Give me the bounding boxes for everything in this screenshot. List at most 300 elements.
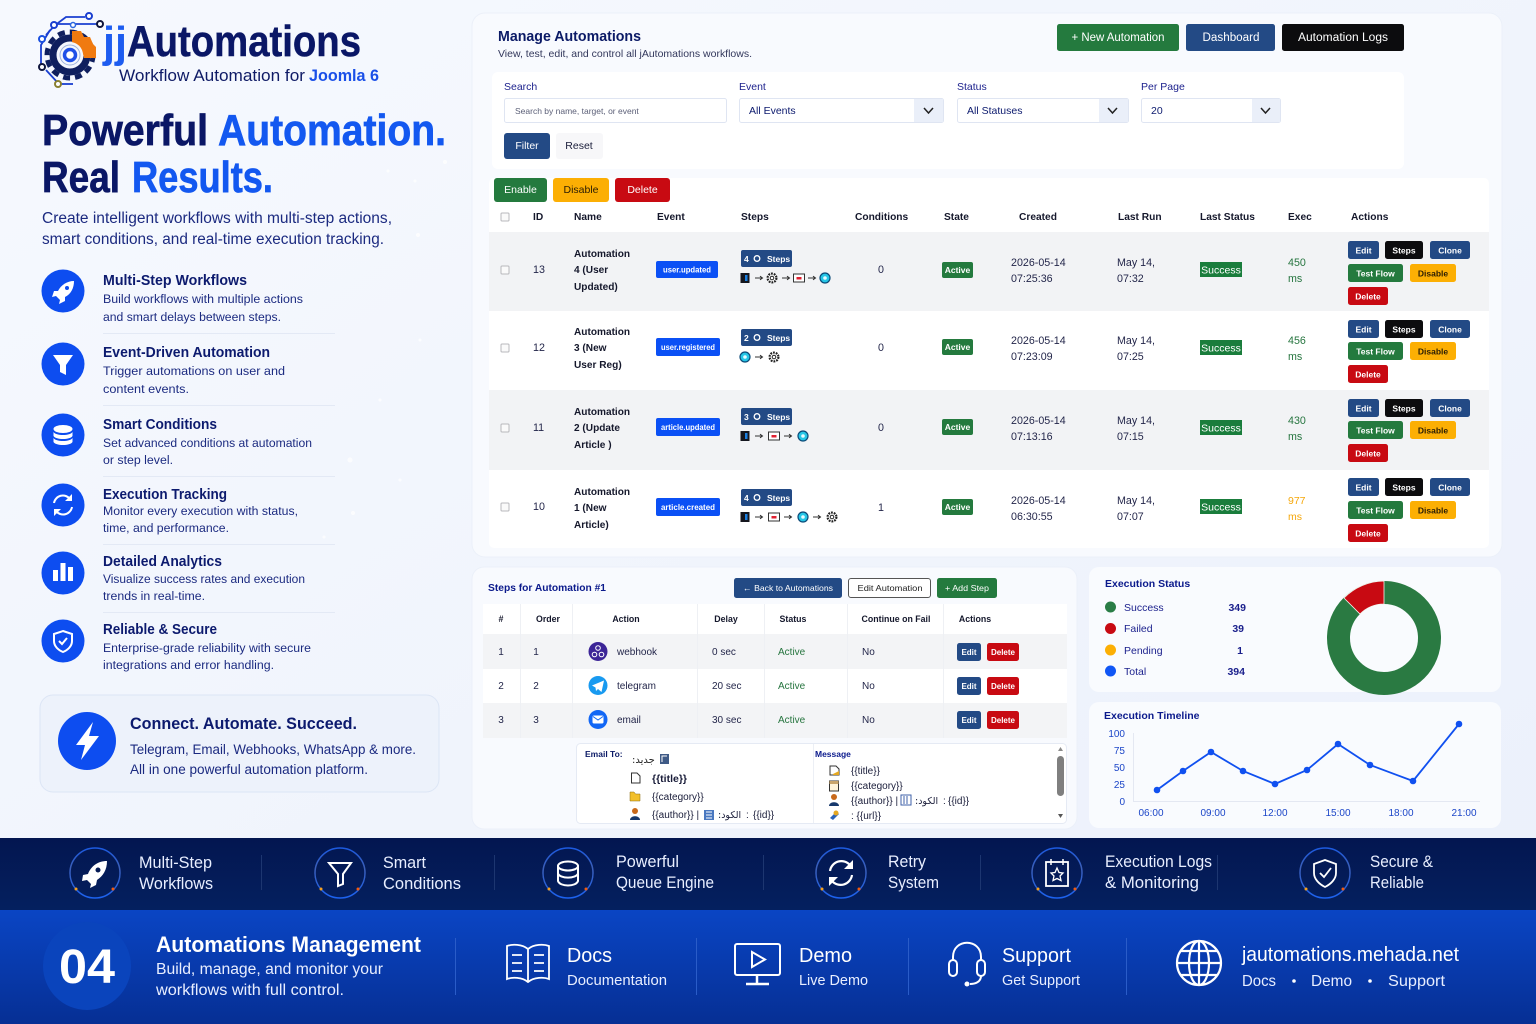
row: automation 11: Delete bbox=[1355, 448, 1381, 458]
headline bbox=[42, 106, 446, 202]
button: reset bbox=[556, 133, 603, 159]
event select bbox=[740, 98, 944, 122]
panel: execution status: Execution Status bbox=[1105, 578, 1190, 590]
row: automation 13: Steps bbox=[1392, 246, 1416, 256]
status select: All Statuses bbox=[967, 105, 1022, 117]
logo wordmark: jj bbox=[102, 18, 127, 67]
event select: All Events bbox=[749, 105, 796, 117]
row: automation 11: article.updated bbox=[661, 422, 715, 432]
legend: Success bbox=[1124, 602, 1164, 614]
message column: {{category}} bbox=[851, 781, 903, 792]
row: automation 11 bbox=[501, 399, 1470, 462]
legend: Pending bbox=[1124, 645, 1163, 657]
step row: email: Edit bbox=[961, 716, 977, 725]
section number bbox=[43, 922, 131, 1010]
message column: {{title}} bbox=[851, 766, 881, 777]
row: automation 12: Clone bbox=[1438, 324, 1462, 334]
row: automation 12: 07:23:09 bbox=[1011, 351, 1053, 363]
link: docs: Documentation bbox=[567, 973, 667, 989]
row: automation 10: ms bbox=[1288, 511, 1302, 523]
strip item: smart conditions: Smart bbox=[383, 854, 426, 872]
line chart bbox=[1108, 721, 1480, 819]
feature: reliable and secure: Reliable & Secure bbox=[103, 622, 217, 638]
strip item: smart conditions bbox=[315, 848, 461, 898]
strip item: retry system: Retry bbox=[888, 853, 927, 871]
feature list bbox=[42, 270, 335, 672]
step row: email: 3 bbox=[498, 715, 504, 726]
table header: Conditions bbox=[855, 212, 909, 223]
bulk buttons: Delete bbox=[627, 184, 658, 196]
step row: webhook bbox=[498, 642, 1019, 661]
row: automation 10: 10 bbox=[533, 501, 545, 513]
strip item: execution logs: Execution Logs bbox=[1105, 853, 1212, 871]
line chart: 06:00 bbox=[1138, 808, 1164, 819]
row: automation 13: ms bbox=[1288, 273, 1302, 285]
legend: Failed bbox=[1124, 623, 1153, 635]
row: automation 12: 2026-05-14 bbox=[1011, 335, 1066, 347]
feature: event-driven automation: Event-Driven Automation bbox=[103, 345, 270, 361]
row: automation 10: article.created bbox=[661, 502, 715, 512]
row: automation 13: Automation bbox=[574, 249, 630, 260]
row: automation 13: Disable bbox=[1418, 268, 1448, 278]
panel: execution timeline: Execution Timeline bbox=[1104, 710, 1200, 722]
panel: manage automations bbox=[472, 13, 1502, 557]
link: website: Docs bbox=[1242, 973, 1276, 990]
bulk buttons: Disable bbox=[563, 184, 599, 196]
row: automation 13: 450 bbox=[1288, 257, 1306, 269]
row: automation 11: 07:13:16 bbox=[1011, 431, 1053, 443]
row: automation 11: Disable bbox=[1418, 426, 1448, 436]
strip item: multi-step workflows: Multi-Step bbox=[139, 854, 212, 872]
row: automation 10: Active bbox=[945, 502, 971, 512]
email column: :جديد bbox=[632, 755, 655, 766]
row: automation 10: 4 bbox=[744, 493, 749, 503]
feature: smart conditions: or step level. bbox=[103, 453, 173, 467]
step row: telegram: 20 sec bbox=[712, 681, 741, 692]
intro text: smart conditions, and real-time execution tracking. bbox=[42, 231, 384, 248]
link: demo bbox=[735, 944, 868, 989]
feature: detailed analytics: Visualize success rates and execution bbox=[103, 572, 305, 586]
strip item: secure and reliable: Secure & bbox=[1370, 853, 1433, 871]
status select bbox=[958, 98, 1128, 122]
row: automation 11: Article ) bbox=[574, 440, 612, 451]
table header: Event bbox=[657, 212, 685, 223]
row: automation 11: ms bbox=[1288, 431, 1302, 443]
band: feature strip bbox=[0, 838, 1536, 910]
logo: Automations bbox=[127, 17, 361, 66]
email column: : bbox=[746, 810, 749, 821]
legend: 394 bbox=[1227, 666, 1245, 678]
row: automation 10 bbox=[501, 478, 1470, 542]
row: automation 12: Disable bbox=[1418, 346, 1448, 356]
panel heading: Manage Automations bbox=[498, 29, 641, 45]
headline: Real bbox=[42, 153, 120, 202]
filter card: Event bbox=[739, 81, 766, 93]
row: automation 13: 07:32 bbox=[1117, 273, 1144, 285]
legend bbox=[1105, 602, 1246, 678]
row: automation 10: Steps bbox=[1392, 482, 1416, 492]
row: automation 12: Steps bbox=[767, 333, 790, 343]
row: automation 11: Active bbox=[945, 422, 971, 432]
feature: reliable and secure bbox=[42, 620, 311, 672]
feature: smart conditions: Set advanced conditions at automation bbox=[103, 436, 312, 450]
steps table header bbox=[499, 614, 991, 624]
email column: :الكود bbox=[718, 810, 741, 821]
feature: execution tracking: Monitor every execution with status, bbox=[103, 504, 298, 518]
row: automation 13: 2026-05-14 bbox=[1011, 257, 1066, 269]
row: automation 10: Delete bbox=[1355, 528, 1381, 538]
headline: Powerful bbox=[42, 106, 208, 155]
automations table bbox=[489, 178, 1489, 548]
row: automation 12: May 14, bbox=[1117, 335, 1155, 347]
button: back to automations bbox=[734, 578, 842, 598]
panel: execution status bbox=[1089, 567, 1501, 692]
button: add step bbox=[937, 578, 997, 598]
row: automation 13: Clone bbox=[1438, 246, 1462, 256]
button: automation logs bbox=[1282, 24, 1404, 51]
step row: telegram: 2 bbox=[533, 681, 539, 692]
button: new automation bbox=[1057, 24, 1179, 51]
table header: Exec bbox=[1288, 212, 1312, 223]
link: website: jautomations.mehada.net bbox=[1241, 944, 1459, 966]
icon: gear logo with circuit lines bbox=[39, 13, 103, 87]
link: demo: Demo bbox=[799, 945, 852, 967]
row: automation 11: Success bbox=[1201, 422, 1241, 434]
row: automation 11: Automation bbox=[574, 407, 630, 418]
per page select: 20 bbox=[1151, 105, 1163, 117]
steps table header: Actions bbox=[959, 614, 991, 624]
steps table header: Status bbox=[780, 614, 807, 624]
logo tagline: Workflow Automation for bbox=[119, 66, 305, 85]
strip item: smart conditions: Conditions bbox=[383, 875, 461, 893]
callout: connect automate succeed bbox=[40, 695, 439, 792]
band: footer bbox=[0, 910, 1536, 1024]
row: automation 11: Steps bbox=[767, 412, 790, 422]
legend: 349 bbox=[1228, 602, 1246, 614]
strip item: secure and reliable: Reliable bbox=[1370, 874, 1424, 892]
link: support: Support bbox=[1002, 945, 1071, 967]
row: automation 13: May 14, bbox=[1117, 257, 1155, 269]
step row: webhook: Edit bbox=[961, 648, 977, 657]
strip item: powerful queue engine: Queue Engine bbox=[616, 874, 714, 892]
row: automation 13: 07:25:36 bbox=[1011, 273, 1053, 285]
message column: : bbox=[943, 796, 946, 807]
button: automation logs: Automation Logs bbox=[1298, 32, 1388, 44]
row: automation 13: Active bbox=[945, 265, 971, 275]
link: docs bbox=[507, 945, 667, 989]
row: automation 10: Edit bbox=[1355, 482, 1372, 492]
per page select bbox=[1142, 98, 1280, 122]
table header: ID bbox=[533, 212, 543, 223]
feature: execution tracking: Execution Tracking bbox=[103, 487, 227, 503]
section title: workflows with full control. bbox=[155, 982, 344, 999]
strip item: multi-step workflows: Workflows bbox=[139, 875, 213, 893]
button: filter bbox=[504, 133, 550, 159]
strip item: retry system: System bbox=[888, 874, 939, 892]
row: automation 10: 2026-05-14 bbox=[1011, 495, 1066, 507]
row: automation 10: Test Flow bbox=[1356, 506, 1395, 516]
headline: Results. bbox=[132, 153, 273, 202]
steps table header: Order bbox=[536, 614, 561, 624]
legend: 1 bbox=[1237, 645, 1243, 657]
strip item: powerful queue engine bbox=[543, 848, 714, 898]
message column: {{author}} | bbox=[851, 796, 898, 807]
row: automation 12: ms bbox=[1288, 351, 1302, 363]
button: filter: Filter bbox=[515, 140, 539, 152]
row: automation 10: Article) bbox=[574, 520, 609, 531]
row: automation 10: May 14, bbox=[1117, 495, 1155, 507]
intro text: Create intelligent workflows with multi-step actions, bbox=[42, 210, 392, 227]
feature: multi-step workflows: Build workflows with multiple actions bbox=[103, 292, 303, 306]
row: automation 12: 12 bbox=[533, 342, 545, 354]
step row: telegram bbox=[498, 676, 1019, 695]
feature: smart conditions: Smart Conditions bbox=[103, 417, 217, 433]
logo: Joomla 6 bbox=[309, 66, 379, 85]
row: automation 13: Updated) bbox=[574, 282, 618, 293]
row: automation 12: 3 (New bbox=[574, 343, 607, 354]
row: automation 11: 0 bbox=[878, 422, 884, 434]
line chart: 15:00 bbox=[1325, 808, 1351, 819]
search input: Search by name, target, or event bbox=[515, 106, 639, 116]
feature: detailed analytics: trends in real-time. bbox=[103, 589, 205, 603]
button: reset: Reset bbox=[565, 140, 593, 152]
step row: telegram: Delete bbox=[991, 682, 1016, 691]
row: automation 13: Test Flow bbox=[1356, 268, 1395, 278]
row: automation 13 bbox=[501, 241, 1470, 305]
steps table bbox=[483, 604, 1067, 738]
row: automation 11: Test Flow bbox=[1356, 426, 1395, 436]
email column: Email To: bbox=[585, 749, 623, 759]
step row: webhook: 1 bbox=[498, 647, 504, 658]
button: back to automations: ← Back to Automations bbox=[743, 583, 833, 593]
section number: 04 bbox=[59, 941, 115, 994]
button: edit automation bbox=[848, 578, 930, 598]
row: automation 11: 11 bbox=[533, 422, 544, 434]
feature: execution tracking bbox=[42, 484, 298, 535]
step row: webhook: No bbox=[862, 647, 875, 658]
row: automation 10: Success bbox=[1201, 502, 1241, 514]
message column: Message bbox=[815, 749, 851, 759]
step row: telegram: 2 bbox=[498, 681, 504, 692]
email column: {{category}} bbox=[652, 792, 704, 803]
step row: webhook: Delete bbox=[991, 648, 1016, 657]
steps table header: Continue on Fail bbox=[862, 614, 930, 624]
row: automation 12: 456 bbox=[1288, 335, 1306, 347]
filter card: Per Page bbox=[1141, 81, 1185, 93]
row: automation 12: User Reg) bbox=[574, 360, 622, 371]
line chart: 0 bbox=[1119, 797, 1125, 808]
scrollbar bbox=[1057, 747, 1064, 818]
row: automation 12: 0 bbox=[878, 342, 884, 354]
line chart: 25 bbox=[1114, 780, 1125, 791]
message column: {{id}} bbox=[948, 796, 970, 807]
line chart: 09:00 bbox=[1200, 808, 1226, 819]
table header: Steps bbox=[741, 212, 769, 223]
callout: connect automate succeed: Telegram, Email, Webhooks, WhatsApp & more. bbox=[130, 742, 416, 757]
filter card bbox=[492, 72, 1404, 169]
feature: multi-step workflows: Multi-Step Workflows bbox=[103, 273, 247, 289]
row: automation 11: 2 (Update bbox=[574, 423, 620, 434]
steps table header: Action bbox=[612, 614, 640, 624]
row: automation 10: Clone bbox=[1438, 482, 1462, 492]
step row: webhook: 0 sec bbox=[712, 647, 736, 658]
filter card: Search bbox=[504, 81, 537, 93]
row: automation 10: 1 (New bbox=[574, 503, 607, 514]
row: automation 11: 07:15 bbox=[1117, 431, 1144, 443]
step row: email: Active bbox=[778, 715, 806, 726]
feature: reliable and secure: Enterprise-grade reliability with secure bbox=[103, 641, 311, 655]
step row: email: email bbox=[617, 715, 641, 726]
step row: telegram: Edit bbox=[961, 682, 977, 691]
callout: connect automate succeed: Connect. Automate. Succeed. bbox=[130, 714, 357, 733]
step row: email bbox=[498, 710, 1019, 729]
line chart: 75 bbox=[1114, 746, 1125, 757]
message column: :الكود bbox=[915, 796, 938, 807]
strip item: multi-step workflows bbox=[70, 848, 213, 898]
row: automation 13: 4 (User bbox=[574, 265, 608, 276]
row: automation 10: 1 bbox=[878, 502, 884, 514]
line chart: 50 bbox=[1114, 763, 1125, 774]
link: website: Support bbox=[1388, 973, 1446, 990]
table header: Name bbox=[574, 212, 602, 223]
feature: event-driven automation: content events. bbox=[103, 382, 189, 396]
background sparkle particles bbox=[322, 160, 447, 538]
table header: Actions bbox=[1351, 212, 1389, 223]
email column bbox=[585, 749, 775, 821]
button: edit automation: Edit Automation bbox=[858, 583, 923, 593]
link: website bbox=[1177, 941, 1459, 990]
button: new automation: + New Automation bbox=[1072, 32, 1164, 44]
email preview box bbox=[576, 744, 1066, 824]
panel heading: View, test, edit, and control all jAutomations workflows. bbox=[498, 48, 752, 60]
bulk buttons bbox=[494, 178, 670, 202]
row: automation 10: 977 bbox=[1288, 495, 1306, 507]
strip item: retry system bbox=[816, 848, 939, 898]
step row: email: 30 sec bbox=[712, 715, 741, 726]
panel: steps for automation bbox=[472, 567, 1077, 829]
filter card: Status bbox=[957, 81, 987, 93]
callout: connect automate succeed: All in one powerful automation platform. bbox=[130, 762, 368, 777]
link: website: Demo bbox=[1311, 973, 1352, 990]
step row: email: No bbox=[862, 715, 875, 726]
line chart: 18:00 bbox=[1388, 808, 1414, 819]
intro text bbox=[42, 210, 392, 248]
steps table header: Delay bbox=[714, 614, 738, 624]
row: automation 12: Success bbox=[1201, 342, 1241, 354]
panel: execution timeline bbox=[1089, 702, 1501, 828]
message column: : {{url}} bbox=[851, 811, 882, 822]
donut chart bbox=[1338, 581, 1430, 684]
feature: multi-step workflows bbox=[42, 270, 303, 324]
row: automation 10: 07:07 bbox=[1117, 511, 1144, 523]
step row: telegram: telegram bbox=[617, 681, 656, 692]
row: automation 13: Delete bbox=[1355, 292, 1381, 302]
table header: Last Run bbox=[1118, 212, 1162, 223]
link: support: Get Support bbox=[1002, 973, 1080, 989]
row: automation 12 bbox=[501, 320, 1470, 383]
feature: multi-step workflows: and smart delays between steps. bbox=[103, 310, 281, 324]
row: automation 13: 0 bbox=[878, 264, 884, 276]
row: automation 11: 430 bbox=[1288, 415, 1306, 427]
feature: detailed analytics: Detailed Analytics bbox=[103, 554, 222, 570]
row: automation 11: 2026-05-14 bbox=[1011, 415, 1066, 427]
section title bbox=[155, 932, 422, 999]
legend: 39 bbox=[1232, 623, 1244, 635]
bulk buttons: Enable bbox=[504, 184, 537, 196]
line chart: 12:00 bbox=[1262, 808, 1288, 819]
row: automation 11: Clone bbox=[1438, 404, 1462, 414]
row: automation 13: Steps bbox=[767, 254, 790, 264]
email column: {{author}} | bbox=[652, 810, 699, 821]
row: automation 12: Delete bbox=[1355, 370, 1381, 380]
feature: event-driven automation: Trigger automations on user and bbox=[103, 364, 285, 378]
row: automation 12: Active bbox=[945, 342, 971, 352]
row: automation 12: 07:25 bbox=[1117, 351, 1144, 363]
line chart: 21:00 bbox=[1451, 808, 1477, 819]
row: automation 13: 13 bbox=[533, 264, 545, 276]
row: automation 12: Automation bbox=[574, 327, 630, 338]
feature: execution tracking: time, and performance. bbox=[103, 521, 229, 535]
steps heading: Steps for Automation #1 bbox=[488, 582, 606, 594]
row: automation 13: user.updated bbox=[663, 264, 711, 274]
row: automation 10: Steps bbox=[767, 493, 790, 503]
table header: Created bbox=[1019, 212, 1057, 223]
feature: detailed analytics bbox=[42, 552, 305, 603]
row: automation 10: 06:30:55 bbox=[1011, 511, 1053, 523]
step row: email: Delete bbox=[991, 716, 1016, 725]
step row: telegram: Active bbox=[778, 681, 806, 692]
email column: {{title}} bbox=[652, 773, 687, 785]
step row: webhook: 1 bbox=[533, 647, 539, 658]
row: automation 13: 4 bbox=[744, 254, 749, 264]
link: docs: Docs bbox=[567, 945, 612, 967]
section title: Automations Management bbox=[156, 932, 422, 957]
row: automation 11: 3 bbox=[744, 412, 749, 422]
table header: Last Status bbox=[1200, 212, 1255, 223]
search input bbox=[504, 98, 726, 122]
row: automation 12: 2 bbox=[744, 333, 749, 343]
row: automation 11: Edit bbox=[1355, 404, 1372, 414]
feature: event-driven automation bbox=[42, 342, 285, 396]
panel heading bbox=[498, 29, 752, 60]
section title: Build, manage, and monitor your bbox=[156, 961, 383, 978]
step row: email: 3 bbox=[533, 715, 539, 726]
feature: smart conditions bbox=[42, 414, 312, 467]
row: automation 11: May 14, bbox=[1117, 415, 1155, 427]
link: support bbox=[949, 943, 1080, 989]
strip item: secure and reliable bbox=[1300, 848, 1433, 898]
strip item: execution logs: & Monitoring bbox=[1105, 874, 1199, 892]
row: automation 12: user.registered bbox=[661, 342, 715, 352]
steps table header: # bbox=[499, 614, 504, 624]
row: automation 12: Steps bbox=[1392, 324, 1416, 334]
legend: Total bbox=[1124, 666, 1146, 678]
message column bbox=[815, 749, 970, 822]
line chart: 100 bbox=[1108, 729, 1125, 740]
link: demo: Live Demo bbox=[799, 973, 868, 989]
row: automation 13: Edit bbox=[1355, 246, 1372, 256]
row: automation 12: Test Flow bbox=[1356, 346, 1395, 356]
row: automation 10: Automation bbox=[574, 487, 630, 498]
step row: telegram: No bbox=[862, 681, 875, 692]
logo bbox=[39, 13, 379, 87]
headline: Automation. bbox=[218, 106, 446, 155]
step row: webhook: webhook bbox=[616, 647, 658, 658]
button: dashboard bbox=[1186, 24, 1275, 51]
table header: State bbox=[944, 212, 969, 223]
button: add step: + Add Step bbox=[945, 583, 989, 593]
table header bbox=[501, 212, 1389, 223]
